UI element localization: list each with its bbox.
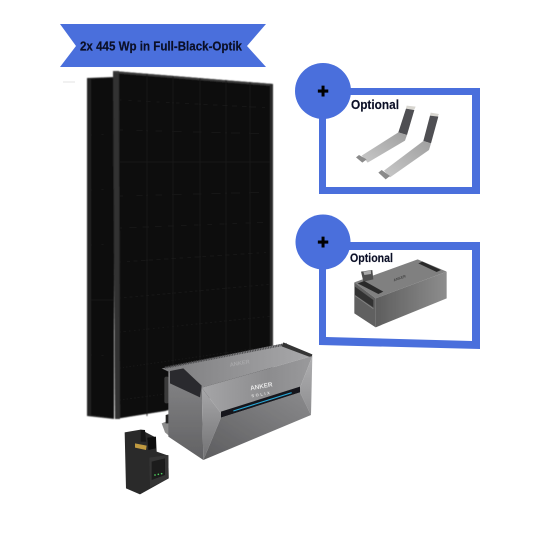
blue frame — [319, 242, 480, 349]
plus badge — [295, 63, 351, 119]
top logo: ANKER — [229, 359, 250, 369]
battery front — [202, 356, 312, 460]
faint mark — [63, 81, 75, 83]
status slit — [221, 387, 300, 418]
battery mounts — [162, 377, 172, 437]
brand: ANKER — [250, 381, 274, 392]
plus badge — [296, 214, 350, 270]
plus badge: + — [317, 232, 329, 254]
main battery: Anker Solix — [162, 342, 312, 460]
battery left end — [168, 372, 203, 460]
label: Optional: Optional — [351, 98, 399, 112]
label: Optional: Optional — [350, 253, 393, 265]
brand — [250, 381, 274, 398]
icon: expansion battery — [354, 259, 447, 327]
solar panels — [87, 71, 273, 419]
back solar panel — [87, 77, 114, 419]
smart meter — [125, 430, 169, 494]
brand: SOLIX — [251, 390, 272, 398]
banner: 2x 445 Wp in Full-Black-Optik: 2x 445 Wp in Full-Black-Optik — [80, 38, 243, 54]
blue frame — [319, 88, 480, 194]
battery top with vents — [162, 343, 312, 388]
icon: expansion battery: ANKER — [393, 274, 407, 282]
icon: mounting brackets — [356, 106, 439, 179]
optional panel: mounting brackets — [295, 63, 480, 194]
optional panel: expansion battery — [296, 214, 480, 349]
banner: 2x 445 Wp in Full-Black-Optik — [60, 24, 266, 67]
front solar panel — [113, 71, 273, 419]
plus badge: + — [317, 82, 329, 102]
